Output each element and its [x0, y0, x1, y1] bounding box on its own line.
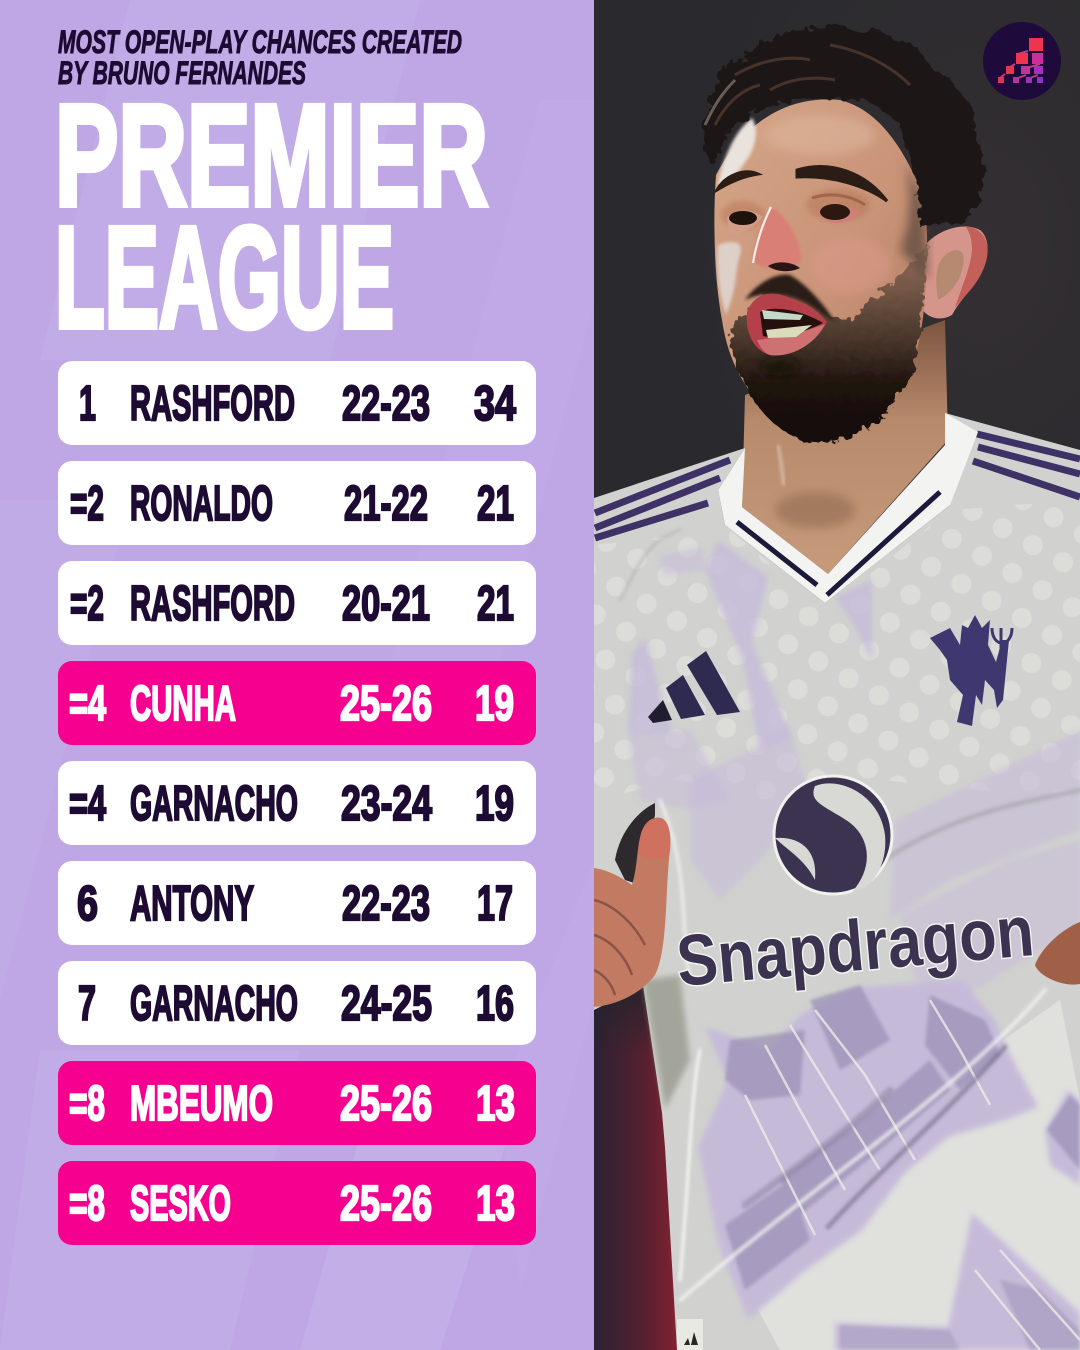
row 5: 19 — [475, 777, 514, 831]
row 4 (highlighted): =4 — [69, 677, 106, 731]
chin shadow — [760, 358, 800, 376]
icon: club crest — [930, 615, 1012, 726]
row 8 (highlighted): MBEUMO — [130, 1077, 273, 1131]
kit tag — [677, 1319, 703, 1350]
collar — [718, 413, 978, 603]
row 3: RASHFORD — [130, 577, 295, 631]
right hand — [1035, 922, 1080, 985]
jersey darker checks — [725, 985, 1080, 1350]
row 9 (highlighted): =8 — [69, 1177, 105, 1231]
row 5: =4 — [69, 777, 106, 831]
row 3: 21 — [477, 577, 514, 631]
heading: subtitle: MOST OPEN-PLAY CHANCES CREATED — [58, 24, 462, 60]
row 4 (highlighted): 19 — [475, 677, 514, 731]
row 5: 23-24 — [341, 777, 432, 831]
icon: sponsor three bars — [648, 651, 740, 723]
heading: subtitle — [58, 24, 462, 91]
row 9 (highlighted): 13 — [476, 1177, 515, 1231]
heading: title: PREMIER — [55, 75, 488, 236]
row 4 (highlighted): 25-26 — [340, 677, 432, 731]
jersey white seams — [745, 1000, 1080, 1350]
eyes — [727, 195, 865, 233]
nose — [754, 207, 801, 270]
row 4 (highlighted): CUNHA — [130, 677, 236, 731]
row 1: 22-23 — [342, 377, 430, 431]
row 8 (highlighted): =8 — [69, 1077, 105, 1131]
ear — [920, 226, 988, 318]
hair — [703, 24, 985, 227]
row 2 — [58, 461, 536, 545]
jersey lilac pattern — [628, 540, 1080, 1350]
mouth — [747, 294, 827, 355]
row 8 (highlighted): 25-26 — [340, 1077, 432, 1131]
eye sockets — [721, 201, 765, 229]
row 3: 20-21 — [342, 577, 430, 631]
row 1: 1 — [79, 377, 96, 431]
row 3 — [58, 561, 536, 645]
beard — [730, 244, 928, 443]
icon: sponsor mark — [774, 776, 892, 894]
row 7: GARNACHO — [130, 977, 298, 1031]
face — [714, 99, 928, 443]
row 3: =2 — [70, 577, 104, 631]
row 7: 24-25 — [341, 977, 432, 1031]
row 6: 17 — [477, 877, 513, 931]
panel: player illustration — [594, 0, 1080, 1350]
row 6: 22-23 — [342, 877, 430, 931]
table: ranking rows — [58, 361, 536, 1245]
row 7: 7 — [78, 977, 96, 1031]
row 2: =2 — [70, 477, 104, 531]
row 6: ANTONY — [130, 877, 254, 931]
left hand — [594, 803, 670, 1007]
row 5: GARNACHO — [130, 777, 298, 831]
row 7 — [58, 961, 536, 1045]
heading: subtitle: BY BRUNO FERNANDES — [58, 55, 306, 91]
row 5 — [58, 761, 536, 845]
logo badge — [983, 22, 1061, 100]
shoulder stripes — [595, 434, 1080, 538]
row 1 — [58, 361, 536, 445]
panel: lilac background — [0, 0, 594, 1350]
heading: title: LEAGUE — [55, 197, 394, 358]
jersey — [594, 413, 1080, 1350]
row 2: 21-22 — [344, 477, 428, 531]
eyebrows — [717, 167, 887, 201]
row 9 (highlighted) — [58, 1161, 536, 1245]
row 9 (highlighted): SESKO — [130, 1177, 231, 1231]
row 8 (highlighted): 13 — [476, 1077, 515, 1131]
row 2: RONALDO — [130, 477, 273, 531]
jersey folds — [620, 530, 1080, 1300]
neck — [742, 320, 948, 574]
moustache — [745, 275, 835, 322]
row 2: 21 — [477, 477, 514, 531]
row 6 — [58, 861, 536, 945]
row 6: 6 — [77, 877, 98, 931]
row 4 (highlighted) — [58, 661, 536, 745]
row 1: RASHFORD — [130, 377, 295, 431]
row 7: 16 — [476, 977, 514, 1031]
row 9 (highlighted): 25-26 — [340, 1177, 432, 1231]
row 8 (highlighted) — [58, 1061, 536, 1145]
heading: title — [55, 75, 488, 358]
row 1: 34 — [474, 377, 516, 431]
